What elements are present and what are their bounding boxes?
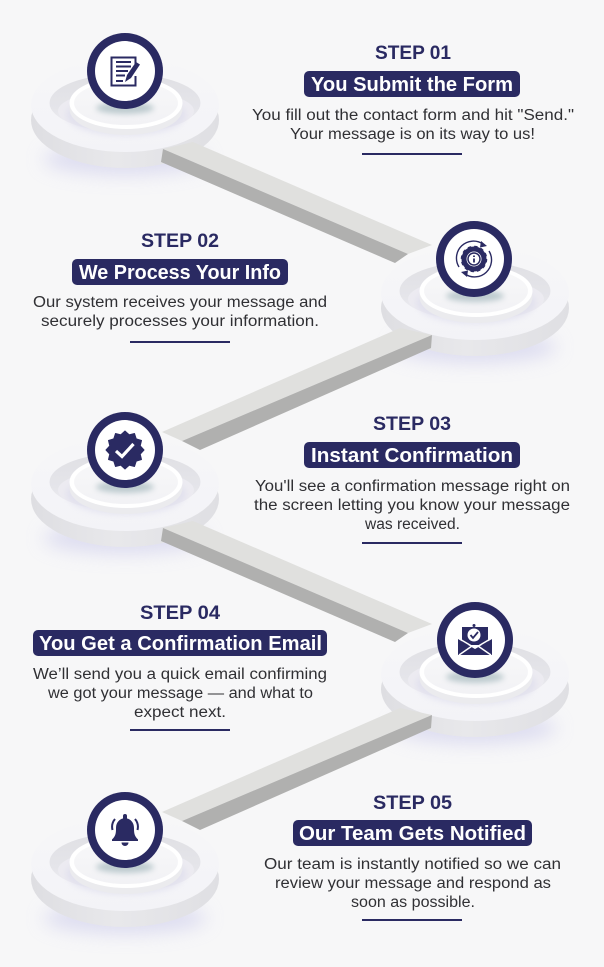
step 05 title: Our Team Gets Notified	[299, 823, 526, 845]
step 02 title: We Process Your Info	[79, 262, 281, 284]
step 04 description: We’ll send you a quick email confirming	[33, 666, 327, 683]
step 03 description	[254, 478, 570, 533]
step 01 description: Your message is on its way to us!	[290, 126, 535, 143]
step 02 description: Our system receives your message and	[33, 294, 327, 311]
step 03 description: the screen letting you know your message	[254, 497, 570, 514]
connector beam 2 to 3	[162, 328, 432, 450]
step 01 label: STEP 01	[375, 42, 451, 64]
ring platform 2	[381, 246, 569, 363]
icon: notification bell	[87, 792, 163, 868]
step 03 description: You'll see a confirmation message right on	[255, 478, 570, 495]
connector beam 4 to 5	[162, 708, 432, 830]
step 01 text block	[252, 42, 574, 155]
step 04 description	[33, 666, 327, 721]
icon: gear with info and arrows	[436, 221, 512, 297]
step 03 title: Instant Confirmation	[311, 445, 513, 467]
step 05 description: soon as possible.	[351, 894, 475, 911]
step 03 description: was received.	[364, 516, 460, 533]
step 03 label: STEP 03	[373, 413, 451, 435]
icon: envelope with confirmation letter	[437, 602, 513, 678]
icon: document with pen	[87, 33, 163, 109]
ring platform 3	[31, 437, 219, 554]
step 01 description	[252, 107, 574, 143]
step 04 title: You Get a Confirmation Email	[39, 633, 322, 655]
icon: verified check badge	[87, 412, 163, 488]
step 03 text block	[254, 413, 570, 544]
ring platform 5	[31, 817, 219, 934]
step 05 label: STEP 05	[373, 792, 452, 814]
step 04 description: expect next.	[134, 704, 226, 721]
step 05 description	[264, 856, 561, 911]
step 02 description	[33, 294, 327, 330]
step 04 description: we got your message — and what to	[47, 685, 313, 702]
connector beam 1 to 2	[161, 142, 432, 263]
step 05 description: review your message and respond as	[275, 875, 551, 892]
step 05 text block	[264, 792, 561, 921]
step 02 label: STEP 02	[141, 230, 219, 252]
step 02 text block	[33, 230, 327, 343]
connector beam 3 to 4	[161, 521, 432, 642]
step 01 title: You Submit the Form	[311, 74, 513, 96]
ring platform 1	[31, 58, 219, 175]
step 04 label: STEP 04	[140, 602, 220, 624]
step 05 description: Our team is instantly notified so we can	[264, 856, 561, 873]
ring platform 4	[381, 627, 569, 744]
step 01 description: You fill out the contact form and hit "Send."	[252, 107, 574, 124]
step 04 text block	[33, 602, 327, 731]
step 02 description: securely processes your information.	[41, 313, 319, 330]
